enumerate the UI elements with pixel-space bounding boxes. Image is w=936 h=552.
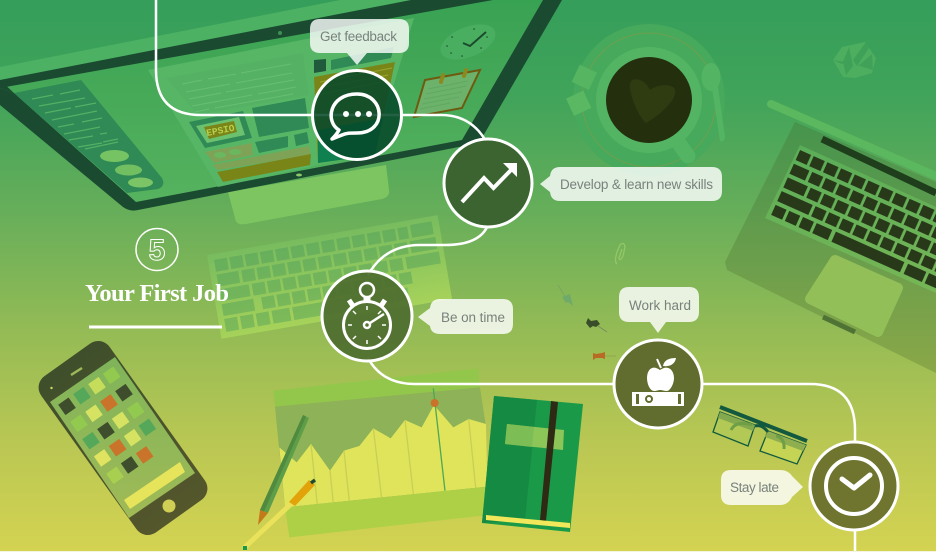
callout: stay late: Stay late (730, 480, 779, 495)
chart paper (273, 368, 488, 537)
callout: stay late (721, 470, 803, 505)
trackpad (810, 260, 898, 332)
chapter number badge (136, 228, 178, 270)
step: develop and learn (444, 139, 722, 227)
icon circle (614, 340, 702, 428)
app icons (58, 367, 156, 484)
icon: stopwatch (344, 283, 390, 348)
screen badge text: EPSIO (205, 123, 236, 139)
paper clip (616, 243, 625, 264)
coffee cup on saucer (566, 24, 725, 176)
callout: be on time: Be on time (441, 310, 505, 325)
desktop monitor (0, 0, 562, 211)
laptop (725, 104, 936, 373)
callout: develop skills: Develop & learn new skills (560, 177, 713, 192)
title underline (89, 326, 222, 328)
step: stay late (721, 442, 898, 530)
smartphone (33, 335, 213, 541)
crumpled paper (833, 42, 876, 78)
career path line (156, 0, 855, 552)
step: get feedback (310, 19, 409, 160)
latte heart (630, 79, 675, 123)
step: work hard (614, 287, 702, 428)
callout: be on time (418, 299, 513, 334)
screen left sidebar (14, 80, 163, 193)
notebook (482, 396, 583, 532)
monitor stand (228, 165, 389, 224)
icon circle (322, 271, 412, 361)
icon circle (444, 139, 532, 227)
title: Your First Job (85, 280, 229, 307)
step: be on time (322, 271, 513, 361)
callout: get feedback: Get feedback (320, 29, 397, 44)
callout: develop skills (540, 167, 722, 201)
icon circle (810, 442, 898, 530)
laptop lid (771, 104, 936, 176)
wall clock on screen (435, 17, 501, 67)
push pins (558, 285, 616, 360)
callout: work hard (619, 287, 699, 333)
yellow pen (243, 480, 315, 550)
laptop keys (771, 150, 936, 290)
sugar cubes (566, 65, 597, 116)
keyboard (207, 215, 452, 339)
icon: apple on book (632, 358, 684, 406)
callout: get feedback (310, 19, 409, 65)
spoon (702, 63, 725, 142)
icon: speech bubble (331, 94, 379, 139)
clipboard on screen (414, 70, 480, 117)
glasses (713, 407, 807, 464)
callout: work hard: Work hard (629, 298, 691, 313)
screen web page (148, 18, 414, 187)
icon circle (312, 70, 402, 160)
chart area (279, 405, 487, 507)
chapter number badge: 5 (149, 234, 165, 267)
green pencil (258, 415, 309, 525)
icon: growth arrow (462, 163, 517, 202)
icon: clock (826, 458, 882, 514)
monitor screen (0, 0, 543, 202)
